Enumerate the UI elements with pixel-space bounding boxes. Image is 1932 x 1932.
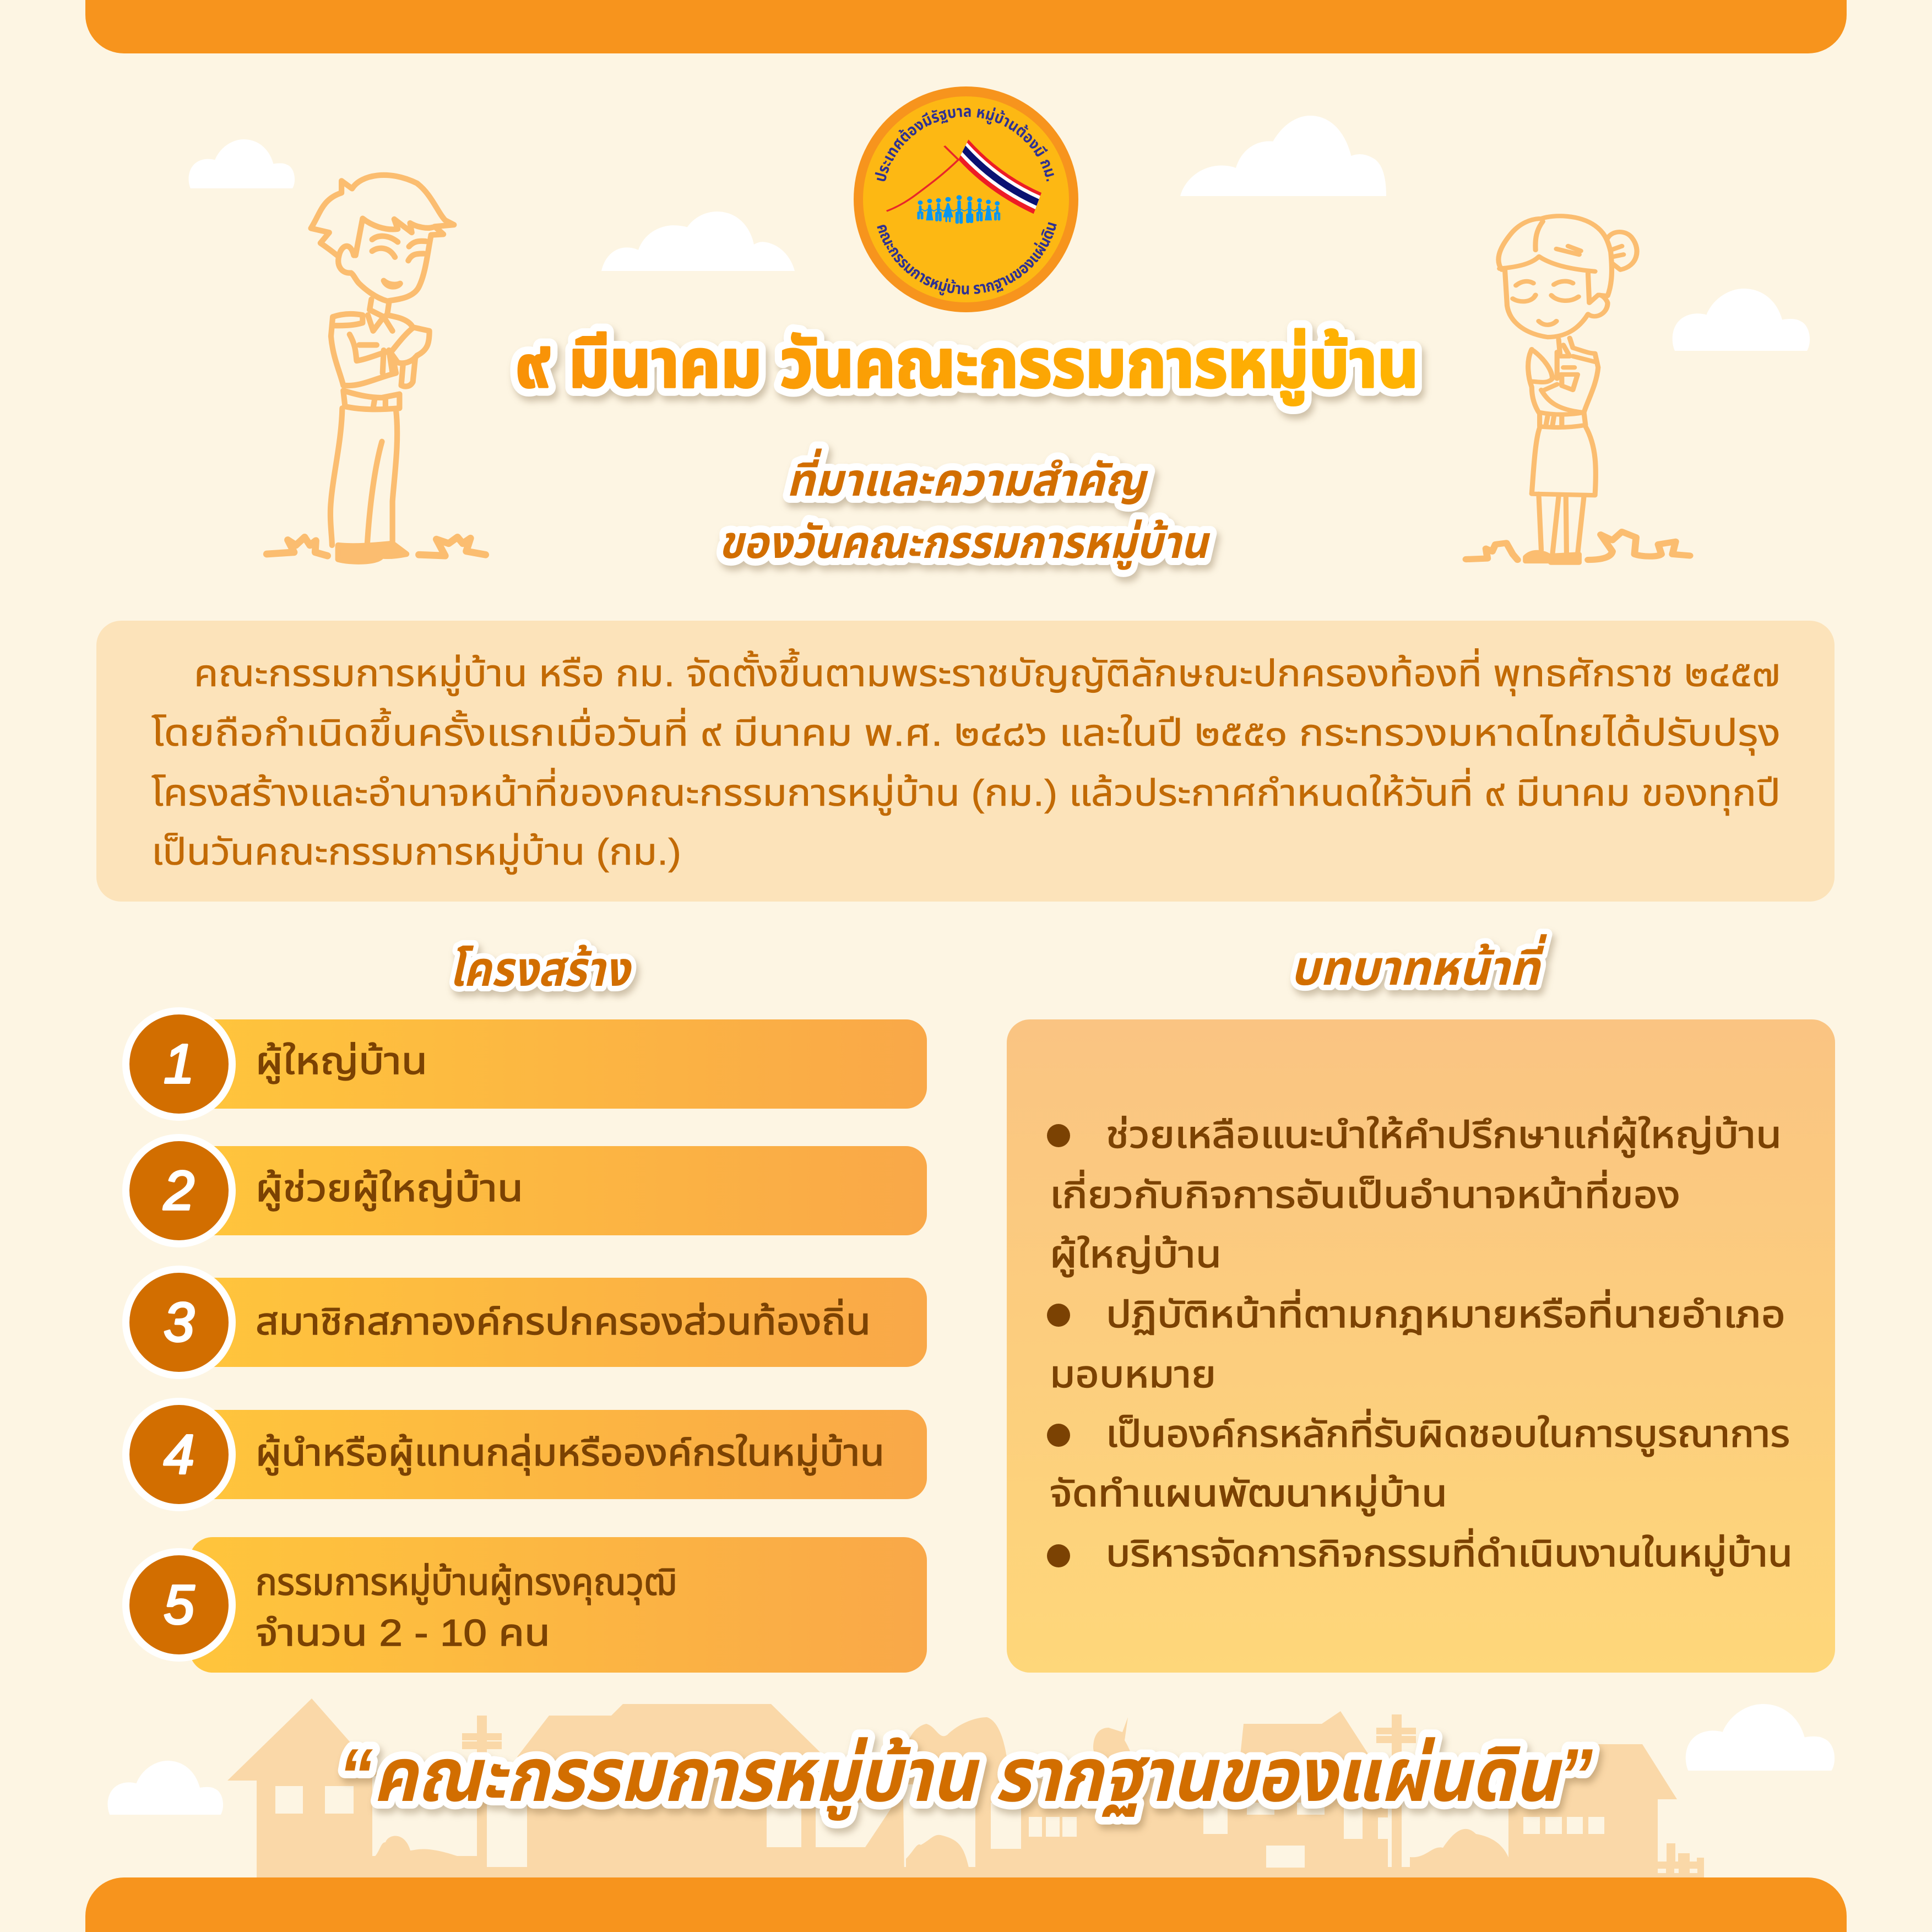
- cloud: upper left: [189, 139, 295, 188]
- logo: upper curved motto: ประเทศต้องมีรัฐบาล หมู่บ้านต้องมี กม.: [875, 107, 1054, 182]
- duty 3: จัดทำแผนพัฒนาหมู่บ้าน: [1050, 1473, 1447, 1516]
- duty 3: [1047, 1409, 1790, 1516]
- cloud: upper middle left: [601, 211, 795, 271]
- cloud: upper right: [1180, 116, 1386, 196]
- logo: committee emblem: [854, 86, 1078, 312]
- list item 5: จำนวน 2 - 10 คน: [256, 1612, 550, 1654]
- village silhouette: [227, 1698, 1704, 1878]
- duty 2: ปฏิบัติหน้าที่ตามกฎหมายหรือที่นายอำเภอ: [1106, 1289, 1786, 1336]
- duty 1: [1047, 1114, 1782, 1277]
- illustration: man in uniform, wai gesture: [267, 175, 486, 562]
- list item 2: 2: [163, 1160, 194, 1222]
- introduction text: โดยถือกำเนิดขึ้นครั้งแรกเมื่อวันที่ ๙ มีนาคม พ.ศ. ๒๔๘๖ และในปี ๒๕๕๑ กระทรวงมหาดไทยได้ปรับปรุง: [151, 708, 1781, 756]
- list item 3: 3: [164, 1291, 194, 1353]
- introduction text: [151, 648, 1781, 875]
- duty 1: ผู้ใหญ่บ้าน: [1050, 1234, 1222, 1277]
- duty 2: มอบหมาย: [1050, 1354, 1216, 1396]
- list item 1: 1: [164, 1033, 194, 1095]
- list item 2: [122, 1134, 927, 1247]
- heading: duties: บทบาทหน้าที่: [1290, 934, 1547, 995]
- duty 1: ช่วยเหลือแนะนำให้คำปรึกษาแก่ผู้ใหญ่บ้าน: [1106, 1114, 1782, 1158]
- duty 2: [1047, 1289, 1786, 1396]
- list item 4: ผู้นำหรือผู้แทนกลุ่มหรือองค์กรในหมู่บ้าน: [256, 1432, 884, 1475]
- logo: lower curved motto: คณะกรรมการหมู่บ้าน รากฐานของแผ่นดิน: [877, 222, 1057, 295]
- list item 3: [122, 1266, 927, 1379]
- list item 4: [122, 1398, 927, 1511]
- list item 5: 5: [164, 1574, 194, 1636]
- illustration: woman in uniform, wai gesture: [1466, 216, 1690, 563]
- introduction text: โครงสร้างและอำนาจหน้าที่ของคณะกรรมการหมู่บ้าน (กม.) แล้วประกาศกำหนดให้วันที่ ๙ มีนาคม ของทุกปี: [151, 768, 1781, 816]
- list item 1: ผู้ใหญ่บ้าน: [256, 1040, 427, 1084]
- bottom slogan: “คณะกรรมการหมู่บ้าน รากฐานของแผ่นดิน”: [339, 1733, 1593, 1821]
- introduction text: เป็นวันคณะกรรมการหมู่บ้าน (กม.): [151, 831, 681, 875]
- subtitle: [719, 448, 1211, 570]
- list item 3: สมาชิกสภาองค์กรปกครองส่วนท้องถิ่น: [256, 1299, 871, 1343]
- duty 1: เกี่ยวกับกิจการอันเป็นอำนาจหน้าที่ของ: [1050, 1170, 1680, 1216]
- duty 3: เป็นองค์กรหลักที่รับผิดชอบในการบูรณาการ: [1106, 1409, 1790, 1457]
- panel: introduction: [96, 621, 1835, 902]
- panel: duties: [1007, 1019, 1835, 1673]
- logo: flag and people: [887, 139, 1041, 222]
- title: ๙ มีนาคม วันคณะกรรมการหมู่บ้าน: [515, 326, 1419, 405]
- list item 5: [122, 1537, 927, 1673]
- title: ๙ มีนาคม วันคณะกรรมการหมู่บ้าน: [515, 326, 1419, 405]
- subtitle line 2: ของวันคณะกรรมการหมู่บ้าน: [719, 518, 1211, 570]
- cloud: bottom left: [108, 1761, 223, 1815]
- bottom orange bar: [85, 1877, 1847, 1932]
- cloud: bottom right: [1686, 1704, 1835, 1771]
- top orange bar: [85, 0, 1847, 53]
- list item 2: ผู้ช่วยผู้ใหญ่บ้าน: [256, 1168, 523, 1211]
- logo: inner disc: [863, 96, 1069, 302]
- list item 1: [122, 1007, 927, 1121]
- subtitle line 1: ที่มาและความสำคัญ: [786, 448, 1148, 506]
- list item 5: กรรมการหมู่บ้านผู้ทรงคุณวุฒิ: [256, 1561, 676, 1605]
- logo: outer ring: [854, 86, 1078, 312]
- duty 4: บริหารจัดการกิจกรรมที่ดำเนินงานในหมู่บ้าน: [1106, 1528, 1793, 1576]
- list item 4: 4: [164, 1424, 194, 1485]
- heading: structure: โครงสร้าง: [449, 942, 632, 996]
- cloud: right: [1673, 289, 1810, 351]
- introduction text: คณะกรรมการหมู่บ้าน หรือ กม. จัดตั้งขึ้นตามพระราชบัญญัติลักษณะปกครองท้องที่ พุทธศักราช ๒๔๕๗: [194, 648, 1781, 696]
